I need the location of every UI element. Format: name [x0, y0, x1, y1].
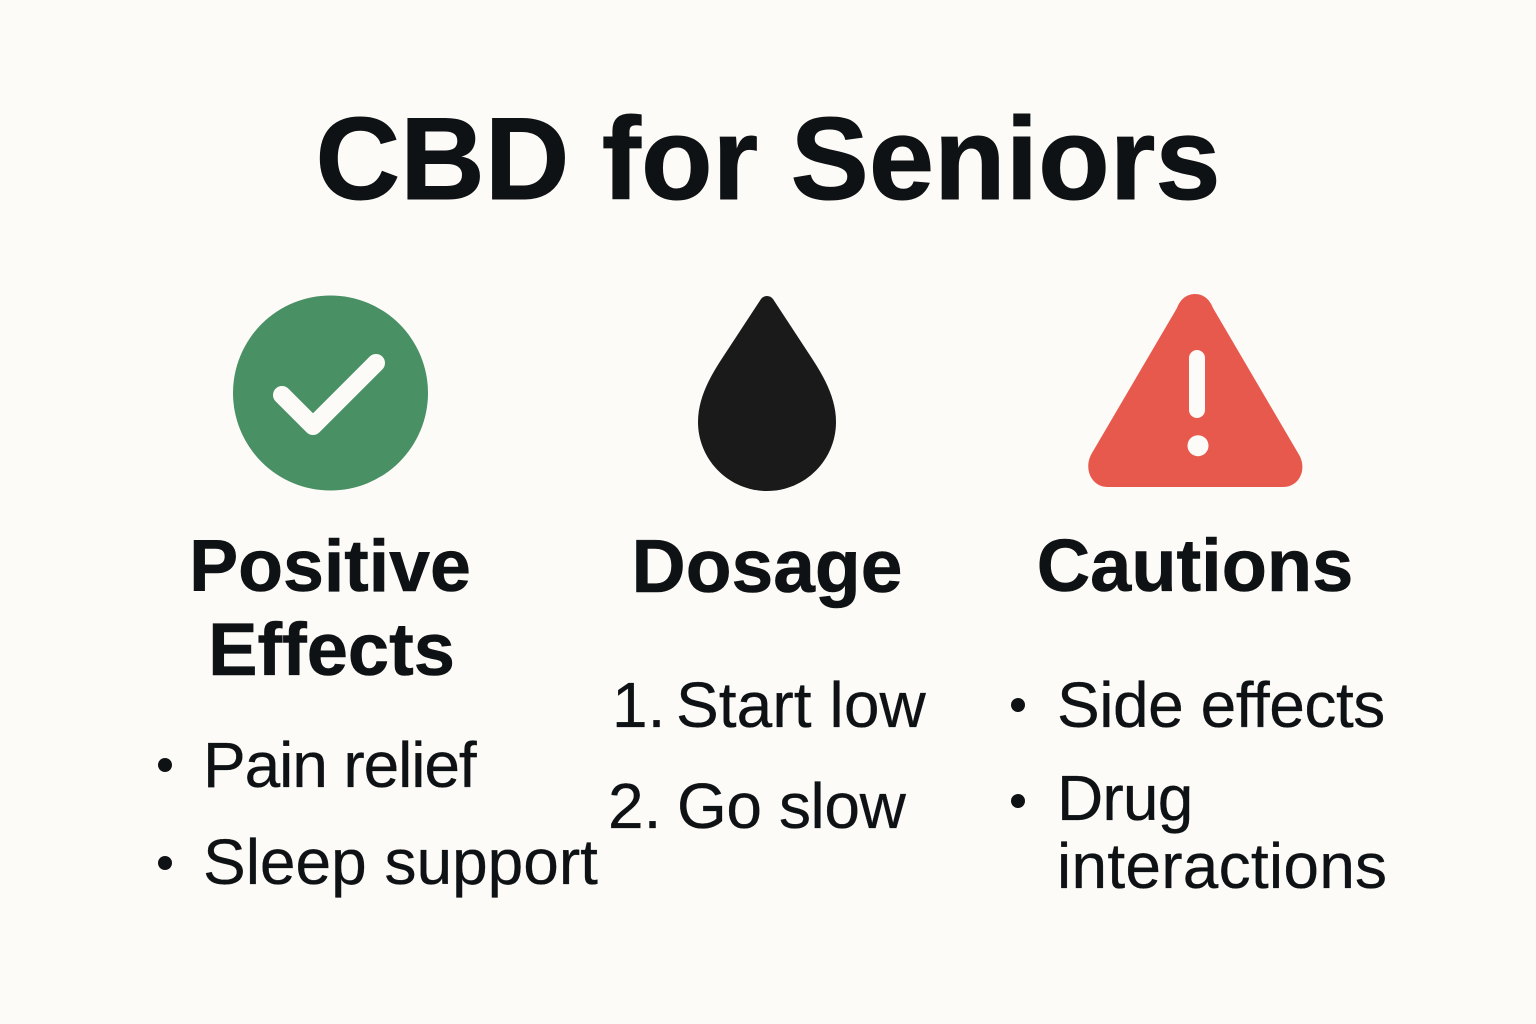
- bullet: [1011, 794, 1025, 808]
- list: dosage: [608, 669, 926, 842]
- icon: black drop: [698, 296, 836, 491]
- heading: dosage: Dosage: [632, 524, 902, 608]
- list: cautions: [1011, 669, 1387, 902]
- bullet: [158, 758, 172, 772]
- item: start low: Start low: [676, 669, 926, 741]
- title: CBD for Seniors: [315, 93, 1221, 224]
- item: sleep support: Sleep support: [203, 826, 598, 898]
- item: drug interactions: Drug: [1057, 762, 1193, 834]
- heading: positive effects: Effects: [208, 608, 455, 691]
- item: pain relief: Pain relief: [203, 729, 476, 801]
- heading: positive effects: [189, 524, 471, 691]
- item: go slow: Go slow: [677, 770, 905, 842]
- item: start low: 1.: [612, 669, 665, 741]
- icon: red warning triangle: [1088, 294, 1302, 487]
- bullet: [158, 856, 172, 870]
- list: positive effects: [158, 729, 598, 898]
- item: go slow: 2.: [608, 770, 661, 842]
- item: drug interactions: interactions: [1057, 830, 1387, 902]
- heading: positive effects: Positive: [189, 524, 471, 607]
- heading: cautions: Cautions: [1037, 524, 1353, 607]
- icon: green check circle: [233, 296, 428, 490]
- item: side effects: Side effects: [1057, 669, 1385, 741]
- bullet: [1011, 698, 1025, 712]
- item: drug interactions: [1057, 762, 1387, 902]
